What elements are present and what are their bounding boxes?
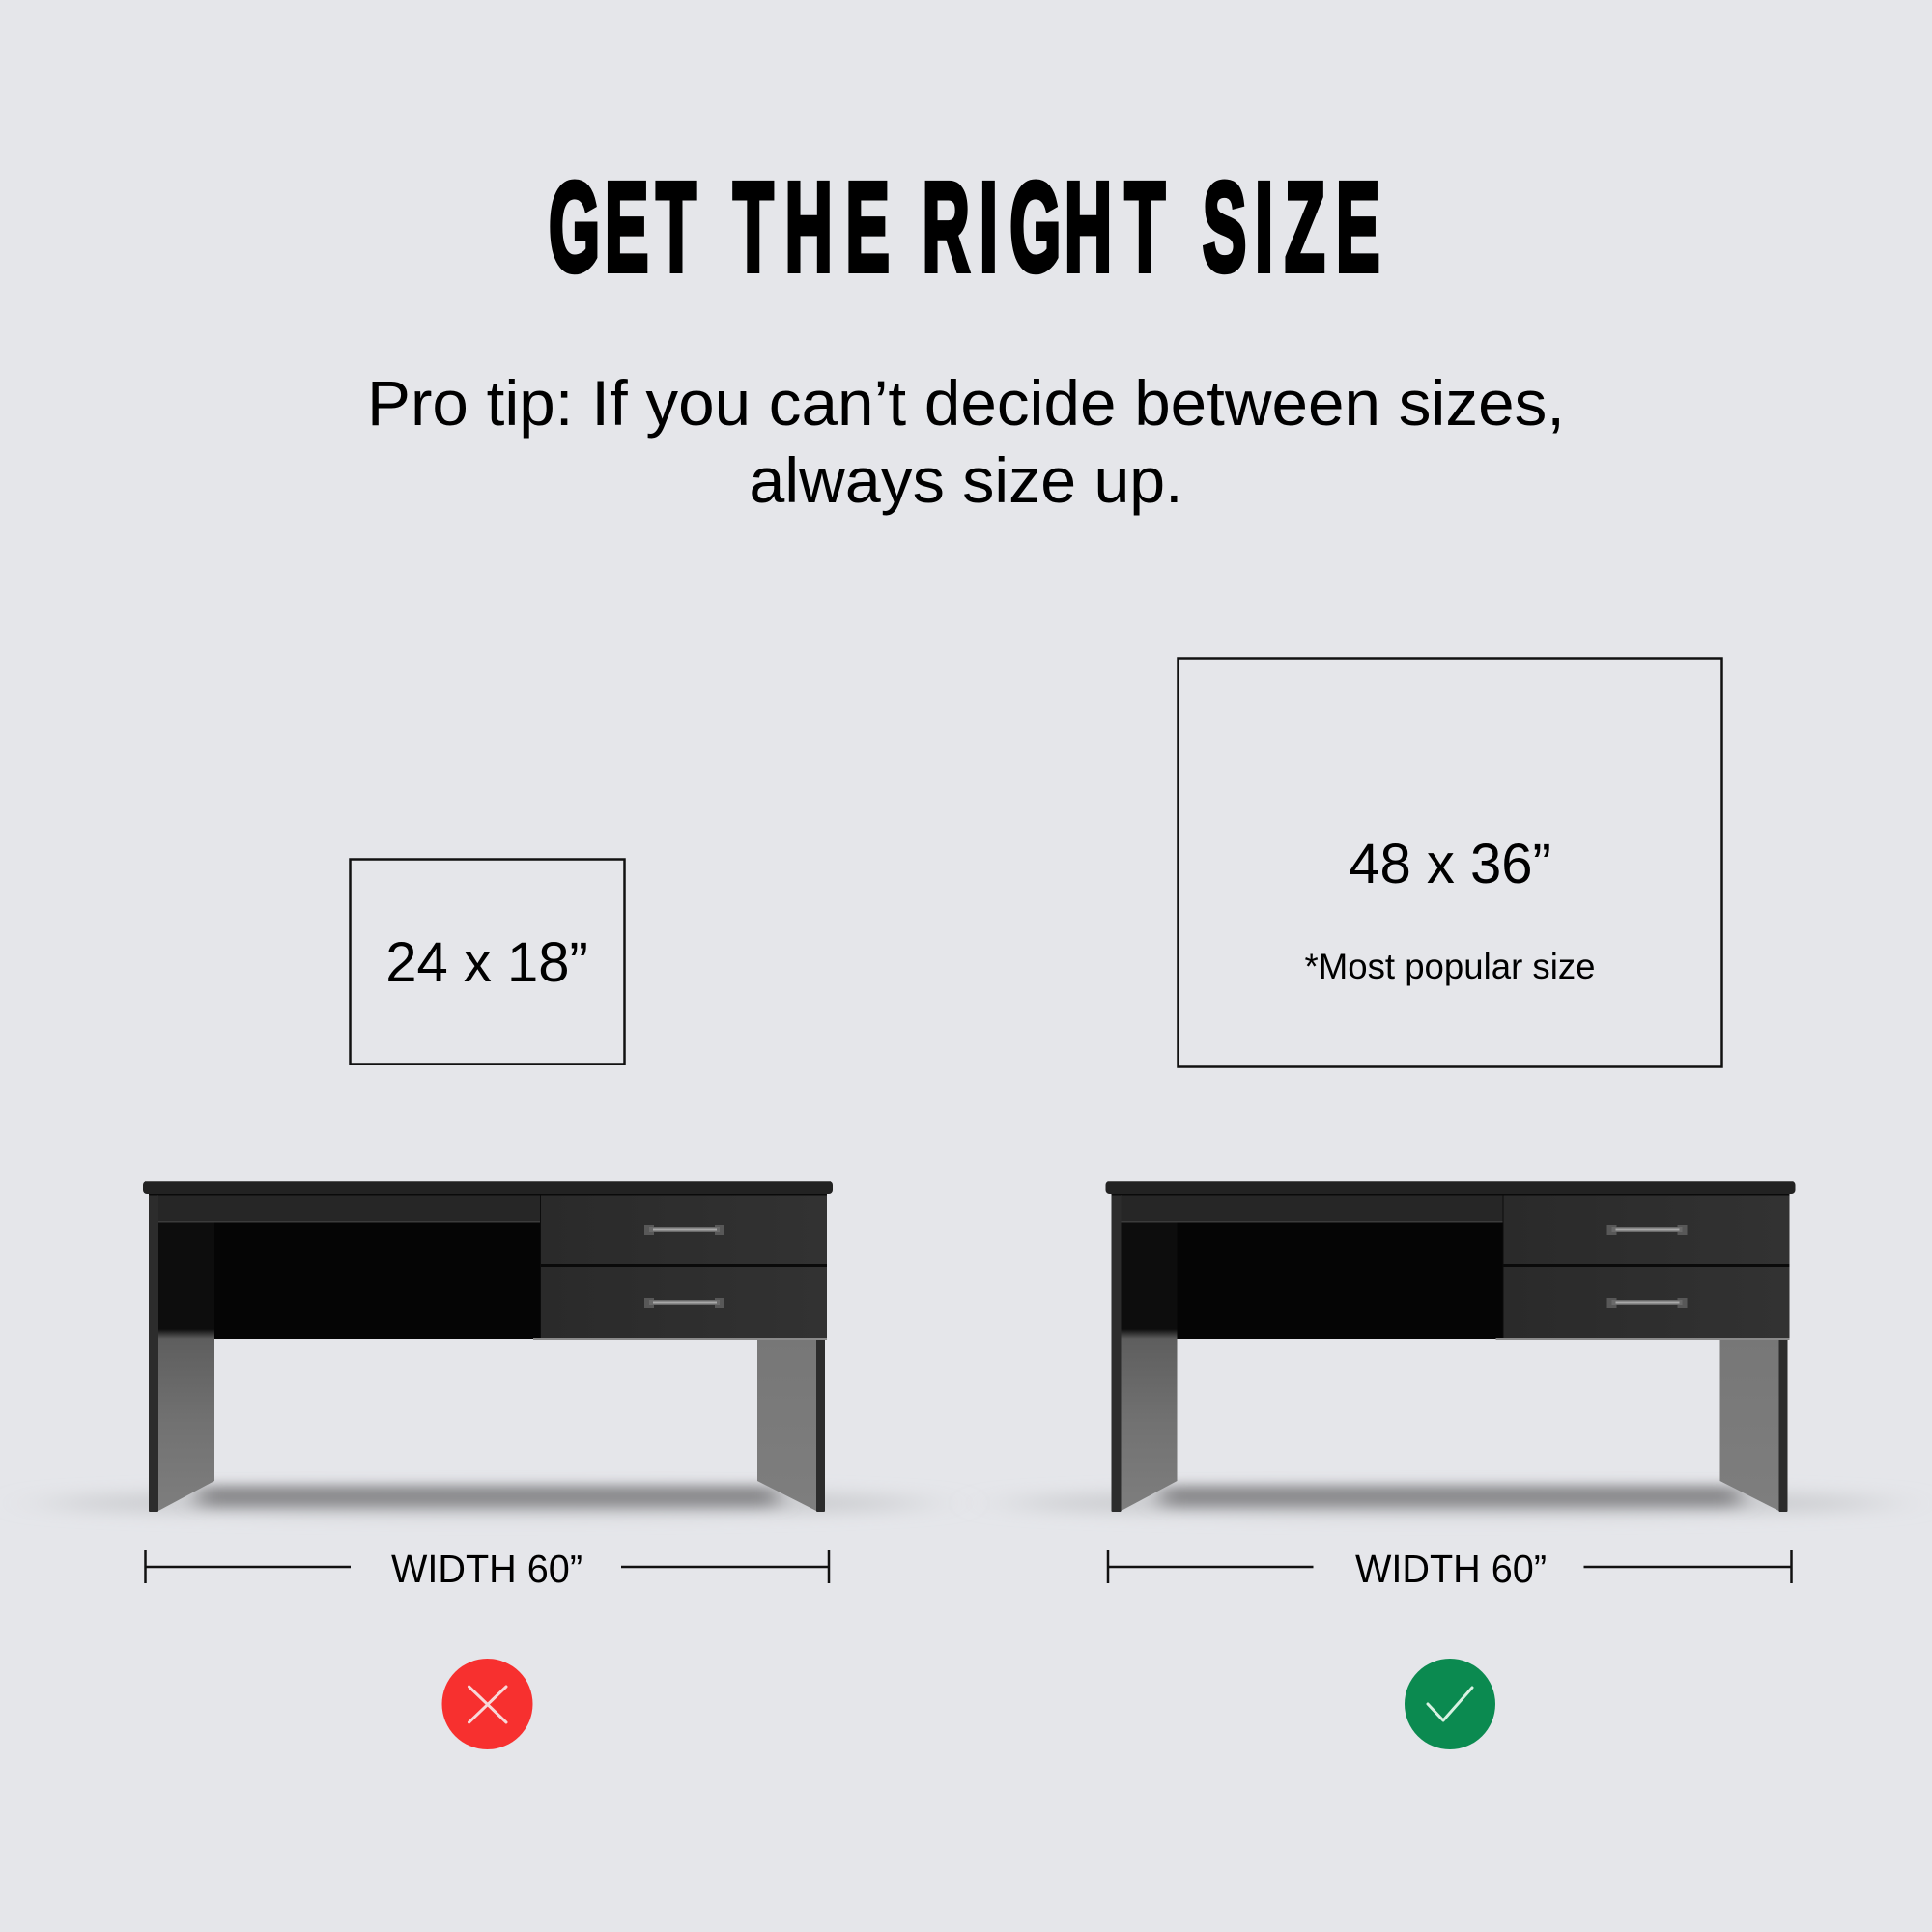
note: most popular size: *Most popular size (1304, 947, 1596, 986)
panel: too small option (43, 860, 932, 1749)
desk knee cavity (158, 1221, 541, 1339)
upper drawer (541, 1195, 827, 1264)
title: GET THE RIGHT SIZE (549, 156, 1379, 298)
dimension: width 60 left (145, 1547, 829, 1591)
desk left leg (149, 1195, 214, 1512)
upper drawer (1503, 1195, 1789, 1264)
desk front panel (1121, 1195, 1503, 1223)
floor shadow (43, 1486, 932, 1515)
size label: 48 x 36: 48 x 36” (1349, 833, 1551, 895)
desk: right (1007, 1181, 1895, 1515)
desk top (143, 1181, 833, 1196)
desk: left (43, 1181, 932, 1515)
lower drawer (1503, 1267, 1789, 1338)
desk right leg (1719, 1339, 1787, 1512)
desk right leg (757, 1339, 825, 1512)
lower drawer (541, 1267, 827, 1338)
panel: right size option (1007, 659, 1895, 1749)
desk knee cavity (1121, 1221, 1503, 1339)
dimension: width 60 left: WIDTH 60” (391, 1547, 582, 1591)
floor shadow (1007, 1486, 1895, 1515)
subtitle: pro tip: Pro tip: If you can’t decide between sizes, (367, 367, 1565, 439)
subtitle: pro tip: always size up. (750, 444, 1182, 516)
desk top (1105, 1181, 1795, 1196)
desk left leg (1111, 1195, 1177, 1512)
size label: 24 x 18: 24 x 18” (385, 931, 588, 994)
subtitle: pro tip (367, 367, 1565, 516)
desk front panel (158, 1195, 540, 1223)
frame: 48 x 36 outline (1179, 659, 1721, 1066)
frame: 24 x 18 outline (350, 860, 624, 1065)
icon: red cross (442, 1659, 533, 1749)
dimension: width 60 right (1108, 1547, 1791, 1591)
dimension: width 60 right: WIDTH 60” (1355, 1547, 1547, 1591)
icon: green check (1405, 1659, 1495, 1749)
